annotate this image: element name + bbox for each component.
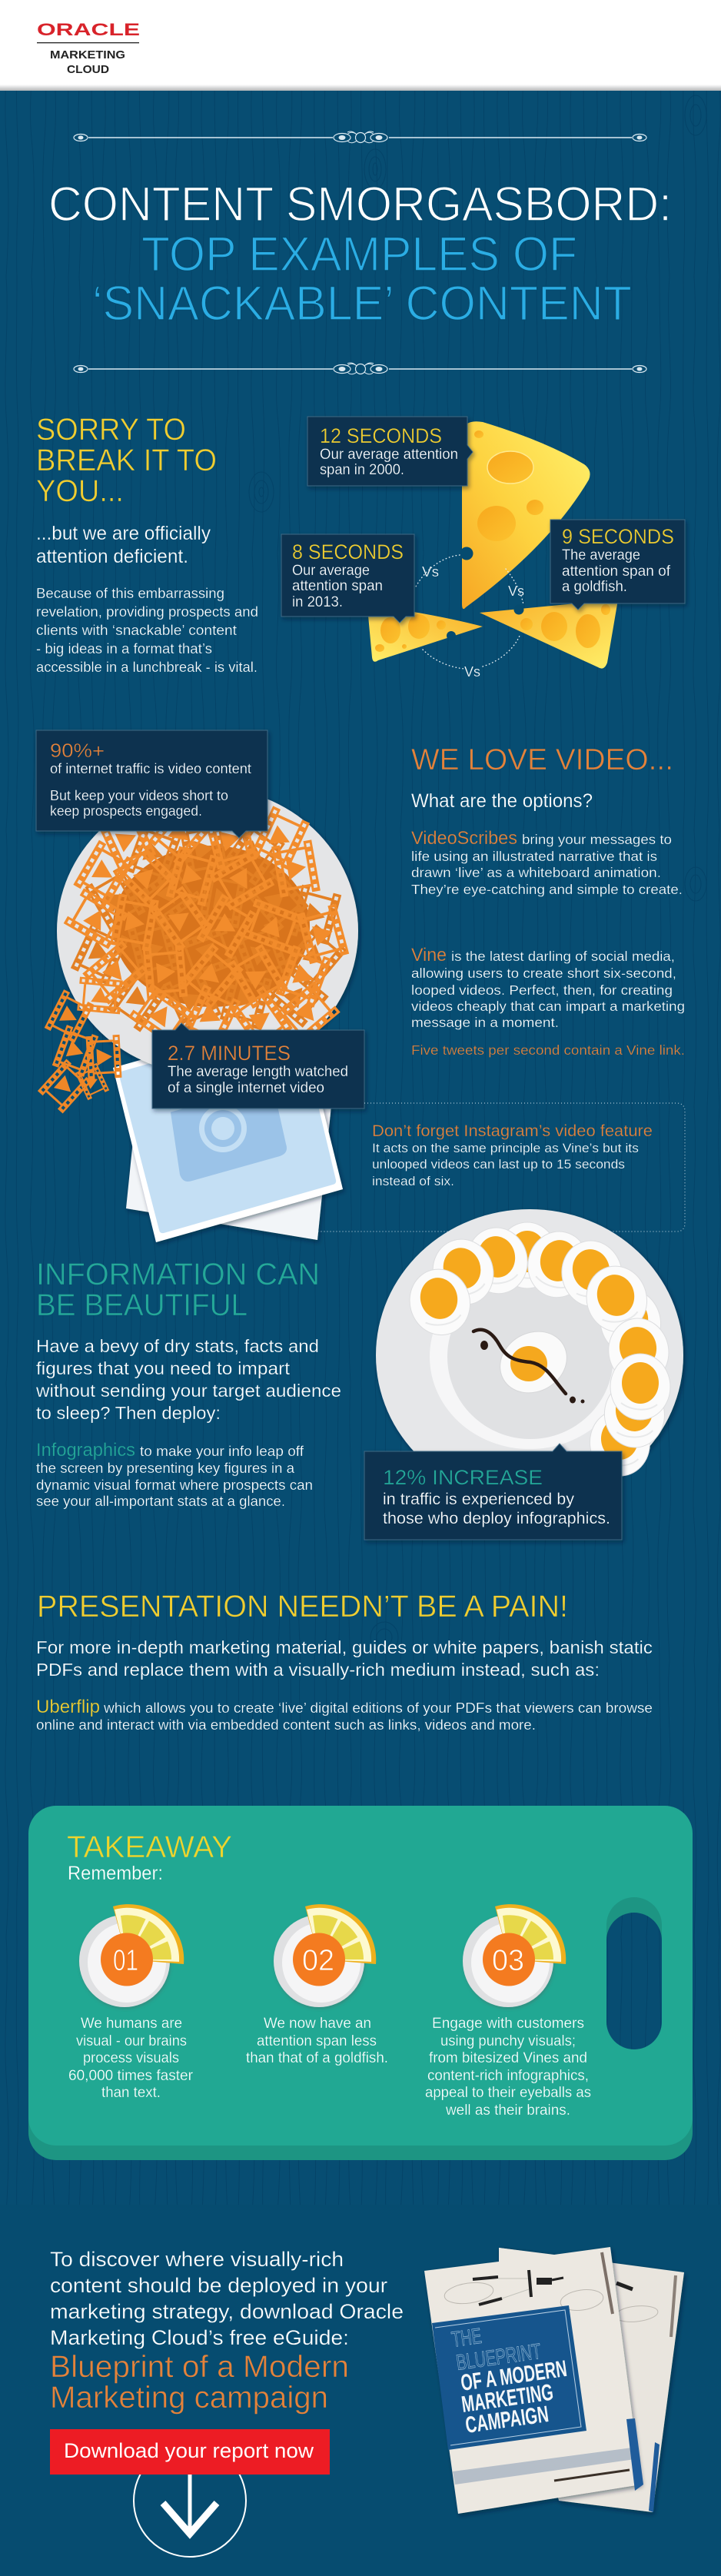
plate with film strips bbox=[38, 787, 358, 1114]
illustration: cheese wedges bbox=[367, 421, 617, 680]
takeaway heading: TAKEAWAY bbox=[67, 1830, 232, 1864]
callout: 12 seconds: 12 SECONDS bbox=[320, 424, 442, 447]
callout: 90% of internet traffic: But keep your videos short to bbox=[50, 788, 228, 803]
right cheese wedge bbox=[480, 600, 617, 669]
callout: 9 seconds: a goldfish. bbox=[562, 579, 627, 595]
body paragraph: Because of this embarrassing bbox=[36, 586, 224, 601]
callout: 9 seconds bbox=[550, 520, 685, 610]
callout: 9 seconds: The average bbox=[562, 547, 640, 563]
VideoScribes paragraph: VideoScribes bbox=[411, 828, 517, 849]
download button bbox=[50, 2429, 330, 2475]
item 03: using punchy visuals; bbox=[440, 2033, 576, 2049]
ruler bbox=[453, 2447, 640, 2485]
blue cover panel bbox=[432, 2305, 586, 2450]
compass and sketch marks bbox=[444, 2252, 613, 2314]
item 03 bbox=[425, 1904, 591, 2119]
Infographics paragraph: see your all-important stats at a glance. bbox=[36, 1494, 285, 1509]
heading: WE LOVE VIDEO... bbox=[411, 743, 673, 776]
plate bbox=[57, 787, 358, 1075]
header bar bbox=[0, 0, 721, 91]
Infographics paragraph: the screen by presenting key figures in a bbox=[36, 1461, 295, 1476]
item 01: process visuals bbox=[83, 2050, 179, 2066]
title bbox=[48, 178, 672, 331]
item 02: We now have an bbox=[264, 2016, 371, 2032]
logo: Oracle Marketing Cloud bbox=[37, 20, 140, 76]
illustration: Instagram cards bbox=[113, 1015, 343, 1242]
callout: 12 seconds: span in 2000. bbox=[320, 462, 404, 478]
front card with camera icon bbox=[113, 1015, 343, 1242]
VideoScribes paragraph: drawn ‘live’ as a whiteboard animation. bbox=[411, 865, 661, 880]
panel: footer call to action bbox=[0, 2205, 721, 2576]
set square bbox=[626, 2418, 643, 2491]
item 03: well as their brains. bbox=[445, 2102, 570, 2119]
VideoScribes paragraph bbox=[411, 828, 683, 897]
callout: 9 seconds: attention span of bbox=[562, 563, 671, 580]
lead paragraph: PDFs and replace them with a visually-rich medium instead, such as: bbox=[36, 1660, 600, 1680]
section: we love video text bbox=[411, 743, 685, 1058]
callout: 12 seconds: Our average attention bbox=[320, 447, 458, 463]
guide title: Marketing campaign bbox=[50, 2381, 328, 2415]
call to action text: To discover where visually-rich bbox=[50, 2248, 344, 2271]
callout: 90% of internet traffic: keep prospects engaged. bbox=[50, 803, 202, 819]
cover title: BLUEPRINT bbox=[455, 2339, 543, 2375]
callout: 90% of internet traffic bbox=[36, 730, 267, 838]
Infographics paragraph: Infographics bbox=[36, 1440, 135, 1461]
download button: Download your report now bbox=[64, 2439, 314, 2462]
wood knots bbox=[249, 95, 706, 1653]
heading: sorry to break it to you bbox=[36, 413, 217, 508]
item 01: visual - our brains bbox=[76, 2033, 187, 2049]
ring of egg slices bbox=[402, 1222, 674, 1478]
heading bbox=[36, 1258, 320, 1322]
ornament divider bottom bbox=[74, 363, 646, 374]
title: ‘SNACKABLE’ CONTENT bbox=[92, 277, 632, 331]
item 01: We humans are bbox=[81, 2016, 182, 2032]
callout: 12% increase: 12% INCREASE bbox=[383, 1466, 543, 1489]
logo: Oracle Marketing Cloud: MARKETING bbox=[50, 48, 125, 61]
sauce squiggle bbox=[473, 1330, 584, 1404]
Vs labels: Vs bbox=[464, 664, 480, 680]
Vs labels: Vs bbox=[422, 564, 439, 580]
lead paragraph: figures that you need to impart bbox=[36, 1358, 290, 1378]
item 01: than text. bbox=[101, 2085, 161, 2101]
Infographics paragraph: to make your info leap off bbox=[140, 1444, 304, 1459]
heading: sorry to break it to you: SORRY TO bbox=[36, 413, 186, 447]
Vine paragraph: message in a moment. bbox=[411, 1015, 559, 1030]
back card bbox=[126, 1035, 335, 1240]
dotted box: Instagram note bbox=[318, 1103, 685, 1231]
body paragraph: revelation, providing prospects and bbox=[36, 604, 258, 620]
Vine paragraph: is the latest darling of social media, bbox=[451, 949, 675, 964]
item 01: 01 bbox=[113, 1944, 138, 1977]
panel: takeaway chopping board bbox=[28, 1806, 693, 2160]
VideoScribes paragraph: life using an illustrated narrative that is bbox=[411, 849, 657, 864]
callout: 8 seconds bbox=[281, 534, 414, 623]
board handle hole bbox=[606, 1897, 662, 2049]
VideoScribes paragraph: bring your messages to bbox=[522, 832, 672, 847]
lead paragraph: Have a bevy of dry stats, facts and bbox=[36, 1336, 319, 1356]
Vs labels bbox=[422, 564, 524, 680]
pencil bbox=[554, 2470, 630, 2481]
Uberflip paragraph: which allows you to create ‘live’ digital editions of your PDFs that viewers can browse bbox=[103, 1700, 653, 1716]
subheading: What are the options? bbox=[411, 790, 593, 812]
VideoScribes paragraph: They’re eye-catching and simple to create. bbox=[411, 882, 683, 897]
heading: PRESENTATION NEEDN’T BE A PAIN! bbox=[37, 1590, 568, 1624]
dotted box: Instagram note: Don’t forget Instagram’s video feature bbox=[372, 1122, 653, 1140]
item 03: Engage with customers bbox=[432, 2016, 584, 2032]
eGuide booklets bbox=[424, 2247, 684, 2514]
item 03: 03 bbox=[492, 1944, 524, 1977]
cover title: OF A MODERN bbox=[459, 2356, 569, 2396]
section: information can be beautiful text bbox=[35, 1258, 341, 1509]
callout: 12% increase bbox=[364, 1444, 622, 1540]
dotted box: Instagram note: unlooped videos can last up to 15 seconds bbox=[372, 1157, 625, 1172]
Vine paragraph bbox=[411, 945, 685, 1058]
heading: sorry to break it to you: BREAK IT TO bbox=[36, 444, 217, 477]
item 02 bbox=[246, 1904, 388, 2066]
logo: Oracle Marketing Cloud: ORACLE bbox=[37, 20, 140, 39]
call to action text: Marketing Cloud’s free eGuide: bbox=[50, 2326, 349, 2349]
heading: INFORMATION CAN bbox=[36, 1258, 320, 1291]
section: attention text bbox=[36, 413, 258, 675]
lead paragraph bbox=[36, 1637, 653, 1680]
callout: 2.7 minutes bbox=[152, 1023, 364, 1109]
section: presentation bbox=[36, 1590, 653, 1733]
title: TOP EXAMPLES OF bbox=[141, 228, 577, 281]
body paragraph: clients with ‘snackable’ content bbox=[36, 623, 237, 638]
big cheese wedge bbox=[460, 421, 590, 609]
heading: BE BEAUTIFUL bbox=[36, 1288, 248, 1322]
item 01: 60,000 times faster bbox=[68, 2068, 194, 2084]
cover title: CAMPAIGN bbox=[464, 2401, 550, 2438]
guide title: Blueprint of a Modern bbox=[50, 2350, 349, 2384]
Vine paragraph: allowing users to create short six-second, bbox=[411, 966, 676, 981]
left cheese wedge bbox=[367, 607, 483, 662]
callout: 12% increase: those who deploy infographics. bbox=[383, 1510, 610, 1527]
lead paragraph: to sleep? Then deploy: bbox=[36, 1403, 221, 1423]
lead paragraph bbox=[35, 1336, 341, 1423]
board body bbox=[28, 1821, 693, 2160]
small film strips off the plate bbox=[38, 989, 121, 1114]
Infographics paragraph bbox=[36, 1440, 313, 1509]
item 03: content-rich infographics, bbox=[427, 2068, 589, 2084]
callout: 2.7 minutes: The average length watched bbox=[168, 1064, 348, 1080]
lead text: ...but we are officially bbox=[36, 523, 211, 544]
guide title bbox=[50, 2350, 349, 2415]
title: CONTENT SMORGASBORD: bbox=[48, 178, 672, 231]
heading: sorry to break it to you: YOU... bbox=[36, 474, 124, 508]
item 02: 02 bbox=[302, 1944, 334, 1977]
Uberflip paragraph: online and interact with via embedded content such as links, videos and more. bbox=[36, 1717, 536, 1733]
illustration: plate of eggs bbox=[376, 1209, 683, 1501]
item 02: attention span less bbox=[257, 2033, 377, 2049]
remember label: Remember: bbox=[68, 1863, 163, 1884]
callout: 8 seconds: in 2013. bbox=[292, 594, 343, 610]
Vine paragraph: Five tweets per second contain a Vine link. bbox=[411, 1042, 685, 1058]
call to action text: content should be deployed in your bbox=[50, 2274, 387, 2297]
back booklet bbox=[499, 2248, 684, 2512]
call to action text: marketing strategy, download Oracle bbox=[50, 2300, 404, 2323]
callout: 12% increase: in traffic is experienced by bbox=[383, 1491, 575, 1508]
pile of orange film strips bbox=[64, 801, 349, 1052]
Vine paragraph: looped videos. Perfect, then, for creating bbox=[411, 982, 673, 998]
dotted comparison arcs bbox=[416, 555, 523, 669]
body paragraph: - big ideas in a format that’s bbox=[36, 641, 212, 656]
body paragraph: accessible in a lunchbreak - is vital. bbox=[36, 660, 258, 675]
egg plate bbox=[376, 1209, 683, 1501]
logo: Oracle Marketing Cloud: CLOUD bbox=[67, 63, 109, 76]
Vine paragraph: Vine bbox=[411, 945, 447, 966]
callout: 12 seconds bbox=[307, 417, 473, 486]
arrow in circle bbox=[134, 2445, 246, 2557]
item 03: appeal to their eyeballs as bbox=[425, 2085, 591, 2101]
front booklet bbox=[424, 2247, 643, 2514]
item 01 bbox=[68, 1904, 194, 2101]
Vs labels: Vs bbox=[508, 583, 524, 599]
lead paragraph: without sending your target audience bbox=[35, 1381, 341, 1401]
Uberflip paragraph bbox=[36, 1697, 653, 1733]
cover title: THE bbox=[450, 2324, 483, 2352]
ornament divider top bbox=[74, 131, 646, 143]
item 02: than that of a goldfish. bbox=[246, 2050, 388, 2066]
centre egg bbox=[489, 1320, 578, 1404]
item 03: from bitesized Vines and bbox=[429, 2050, 587, 2066]
callout: 9 seconds: 9 SECONDS bbox=[562, 525, 674, 548]
Infographics paragraph: dynamic visual format where prospects can bbox=[36, 1477, 313, 1493]
dotted box: Instagram note: It acts on the same principle as Vine’s but its bbox=[372, 1141, 639, 1155]
callout: 90% of internet traffic: of internet traffic is video content bbox=[50, 761, 251, 776]
Uberflip paragraph: Uberflip bbox=[36, 1697, 100, 1717]
dotted box: Instagram note: instead of six. bbox=[372, 1174, 454, 1188]
callout: 8 seconds: 8 SECONDS bbox=[292, 540, 404, 563]
callout: 2.7 minutes: of a single internet video bbox=[168, 1080, 324, 1096]
Vine paragraph: videos cheaply that can impart a marketing bbox=[411, 999, 685, 1014]
cover title bbox=[450, 2324, 569, 2438]
cover title: MARKETING bbox=[460, 2380, 555, 2418]
lead text bbox=[36, 523, 211, 567]
callout: 90% of internet traffic: 90%+ bbox=[50, 740, 105, 762]
body paragraph bbox=[36, 586, 258, 675]
lead text: attention deficient. bbox=[36, 546, 188, 567]
callout: 8 seconds: attention span bbox=[292, 578, 383, 594]
callout: 2.7 minutes: 2.7 MINUTES bbox=[168, 1042, 291, 1065]
callout: 8 seconds: Our average bbox=[292, 563, 370, 579]
lead paragraph: For more in-depth marketing material, guides or white papers, banish static bbox=[36, 1637, 653, 1657]
call to action text bbox=[50, 2248, 404, 2349]
